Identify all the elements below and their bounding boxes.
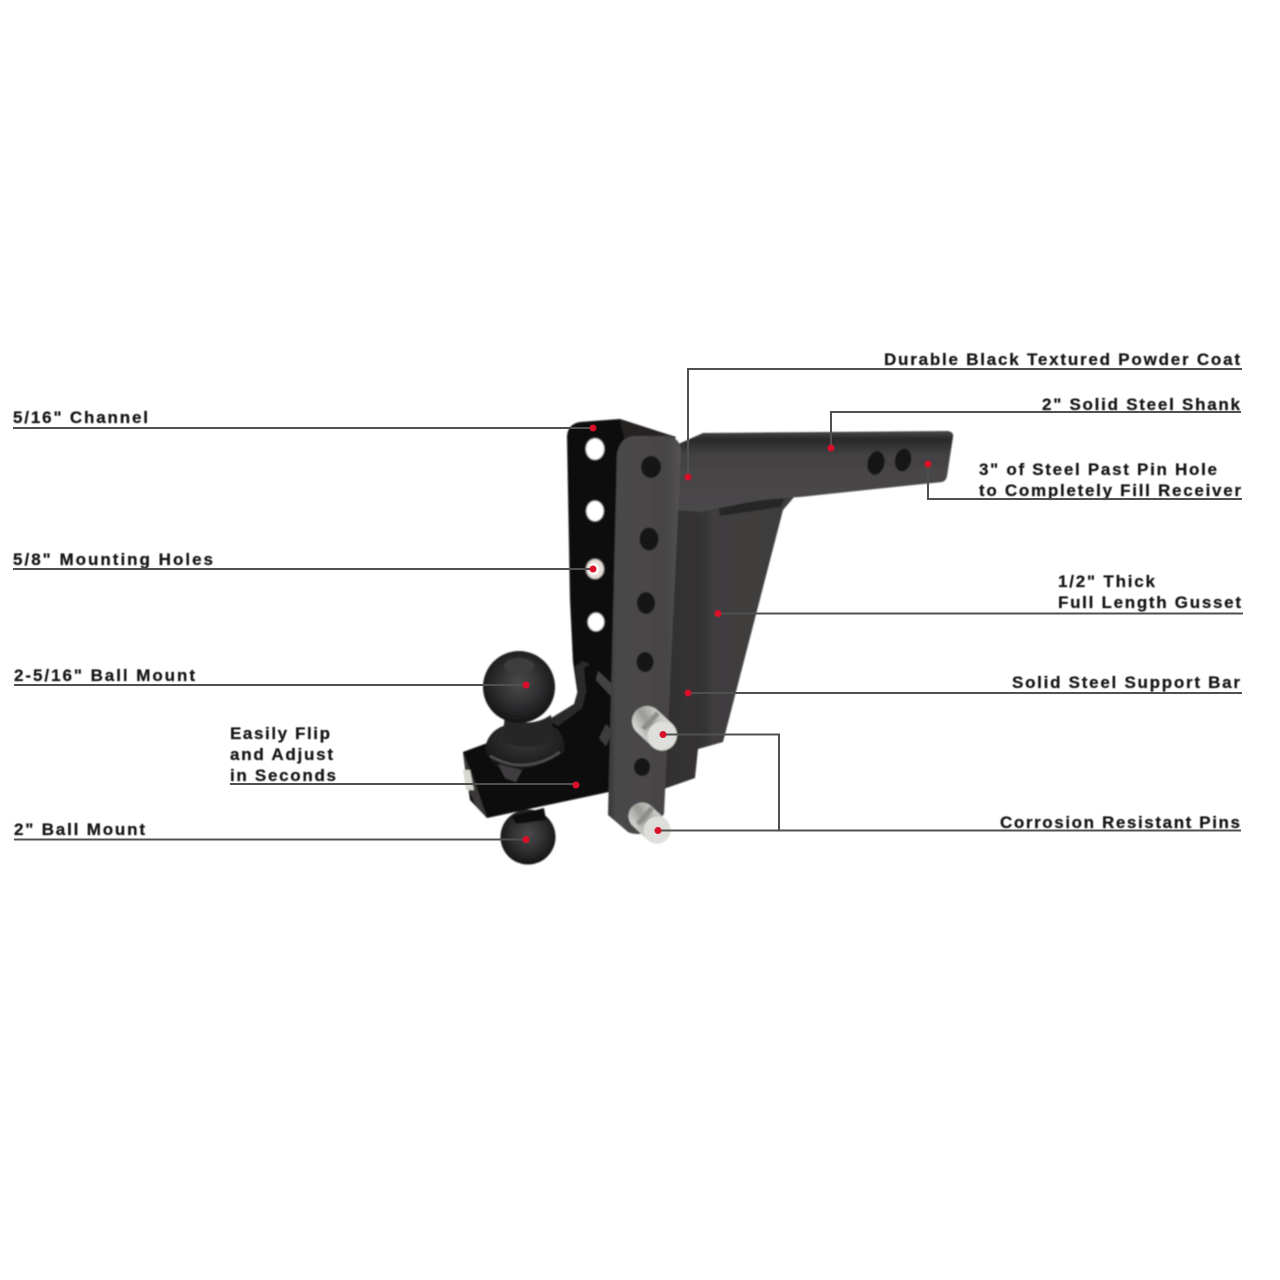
large ball — [483, 651, 555, 747]
callout: 5/8" Mounting Holes — [13, 550, 596, 572]
callout: Solid Steel Support Bar — [684, 673, 1242, 696]
callout: 5/16" Channel — [13, 408, 596, 432]
callout: Corrosion Resistant Pins: Corrosion Resistant Pins — [1000, 813, 1240, 832]
callout: 3" of Steel Past Pin Hole — [924, 460, 1242, 500]
callout: 1/2" Thick Full Length Gusset: 1/2" Thick — [1058, 572, 1156, 591]
callout: 5/16" Channel: 5/16" Channel — [13, 408, 148, 427]
callout: 1/2" Thick Full Length Gusset — [714, 572, 1243, 617]
callout: Easily Flip and Adjust in Seconds: in Seconds — [230, 766, 336, 785]
callout: 2" Ball Mount — [14, 820, 530, 843]
small ball — [500, 808, 556, 864]
upper pin — [643, 713, 676, 750]
callout: 2" Solid Steel Shank — [828, 395, 1241, 452]
callout: Durable Black Textured Powder Coat: Durable Black Textured Powder Coat — [884, 350, 1240, 369]
callout: Easily Flip and Adjust in Seconds: Easily Flip — [230, 724, 330, 743]
callout: 2" Solid Steel Shank: 2" Solid Steel Shank — [1042, 395, 1241, 414]
callout: 3" of Steel Past Pin Hole: to Completely Fill Receiver — [979, 481, 1241, 500]
front plate — [608, 436, 681, 834]
callout: 2-5/16" Ball Mount — [14, 666, 530, 688]
callout: Durable Black Textured Powder Coat — [684, 350, 1242, 480]
callout: Corrosion Resistant Pins — [654, 731, 1241, 834]
shank tube — [674, 431, 953, 512]
callout: Easily Flip and Adjust in Seconds — [230, 724, 580, 788]
lower pin — [638, 808, 670, 844]
callout: 2-5/16" Ball Mount: 2-5/16" Ball Mount — [14, 666, 195, 685]
channel mounting holes — [586, 438, 604, 632]
hitch product illustration — [463, 419, 953, 864]
rear channel — [567, 419, 676, 720]
drawbar and ball mount — [463, 661, 618, 818]
center channel hole with pin — [586, 559, 604, 579]
callout: Easily Flip and Adjust in Seconds: and Adjust — [230, 745, 333, 764]
callout: 5/8" Mounting Holes: 5/8" Mounting Holes — [13, 550, 213, 569]
ball collar and weld — [485, 726, 564, 782]
callout: 3" of Steel Past Pin Hole: 3" of Steel Past Pin Hole — [979, 460, 1217, 479]
callout: 2" Ball Mount: 2" Ball Mount — [14, 820, 145, 839]
callout: 1/2" Thick Full Length Gusset: Full Length Gusset — [1058, 593, 1241, 612]
callout: Solid Steel Support Bar: Solid Steel Support Bar — [1012, 673, 1240, 692]
gusset and support bar — [655, 470, 800, 792]
